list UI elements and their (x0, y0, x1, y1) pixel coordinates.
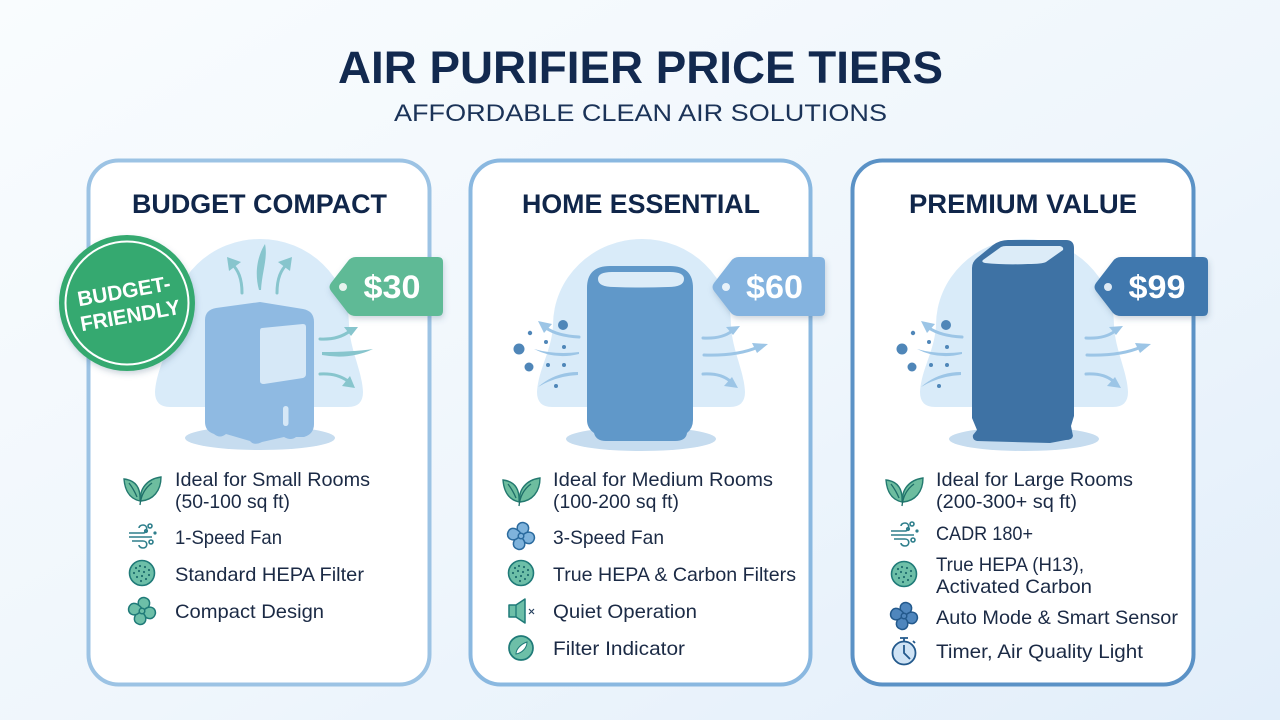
feature: hepa and carbon: True HEPA & Carbon Filters (553, 564, 796, 586)
panel: home essential (470, 160, 825, 684)
price tag: $99 (1094, 257, 1208, 316)
icon: tower purifier (972, 240, 1074, 443)
floor shadow (185, 426, 335, 450)
feature: cadr: CADR 180+ (936, 523, 1033, 545)
feature: true hepa: Activated Carbon (936, 576, 1092, 598)
feature: 1-speed fan: 1-Speed Fan (175, 527, 282, 549)
features list (886, 469, 1179, 664)
airflow and particles (896, 320, 1151, 388)
feature: quiet operation: Quiet Operation (553, 601, 697, 623)
feature: medium rooms: (100-200 sq ft) (553, 491, 679, 513)
floor shadow (949, 427, 1099, 451)
feature: large rooms: Ideal for Large Rooms (936, 469, 1133, 491)
feature: large rooms: (200-300+ sq ft) (936, 491, 1077, 513)
airflow arrows (227, 244, 373, 388)
feature: filter indicator: Filter Indicator (553, 638, 686, 660)
icon: cylinder purifier (587, 266, 693, 441)
feature: small rooms: (50-100 sq ft) (175, 491, 290, 513)
feature: filter indicator (509, 636, 686, 660)
heading: budget compact: BUDGET COMPACT (132, 189, 387, 219)
badge: budget-friendly: BUDGET- (76, 272, 172, 311)
panel: budget compact (59, 160, 443, 684)
feature: 3-speed fan (506, 521, 664, 551)
dome backdrop (537, 239, 745, 407)
heading: home essential: HOME ESSENTIAL (522, 189, 760, 219)
floor shadow (566, 427, 716, 451)
feature: timer: Timer, Air Quality Light (936, 641, 1144, 663)
subtitle: AFFORDABLE CLEAN AIR SOLUTIONS (394, 100, 887, 127)
feature: auto mode (889, 601, 1179, 631)
card frame (470, 160, 810, 684)
feature: quiet operation (509, 599, 697, 623)
price tag: $30 (330, 257, 443, 316)
dome backdrop (920, 239, 1128, 407)
price tag: $99: $99 (1128, 269, 1186, 305)
airflow and particles (514, 320, 768, 388)
title: AIR PURIFIER PRICE TIERS (338, 42, 943, 93)
features list (503, 469, 796, 660)
dome backdrop (155, 239, 363, 407)
price tag: $60: $60 (746, 269, 803, 305)
feature: small rooms (124, 469, 370, 513)
features list (124, 469, 370, 626)
feature: true hepa: True HEPA (H13), (936, 554, 1084, 576)
feature: true hepa (892, 554, 1092, 598)
price tag: $60 (712, 257, 825, 316)
feature: compact design (127, 596, 324, 626)
feature: 3-speed fan: 3-Speed Fan (553, 527, 664, 549)
feature: standard hepa (130, 560, 365, 586)
panel: premium value (852, 160, 1208, 684)
feature: cadr (891, 522, 1033, 546)
feature: timer (892, 638, 1144, 664)
feature: auto mode: Auto Mode & Smart Sensor (936, 607, 1179, 629)
feature: compact design: Compact Design (175, 601, 324, 623)
feature: large rooms (886, 469, 1133, 513)
card frame (852, 160, 1194, 684)
badge: budget-friendly: FRIENDLY (79, 296, 182, 336)
feature: medium rooms (503, 469, 773, 513)
price tag: $30: $30 (364, 269, 420, 305)
heading: premium value: PREMIUM VALUE (909, 189, 1137, 219)
feature: small rooms: Ideal for Small Rooms (175, 469, 370, 491)
badge: budget-friendly (59, 235, 195, 371)
feature: standard hepa: Standard HEPA Filter (175, 564, 365, 586)
icon: compact purifier (205, 302, 314, 444)
card frame (88, 160, 430, 684)
feature: 1-speed fan (129, 524, 282, 549)
feature: medium rooms: Ideal for Medium Rooms (553, 469, 773, 491)
